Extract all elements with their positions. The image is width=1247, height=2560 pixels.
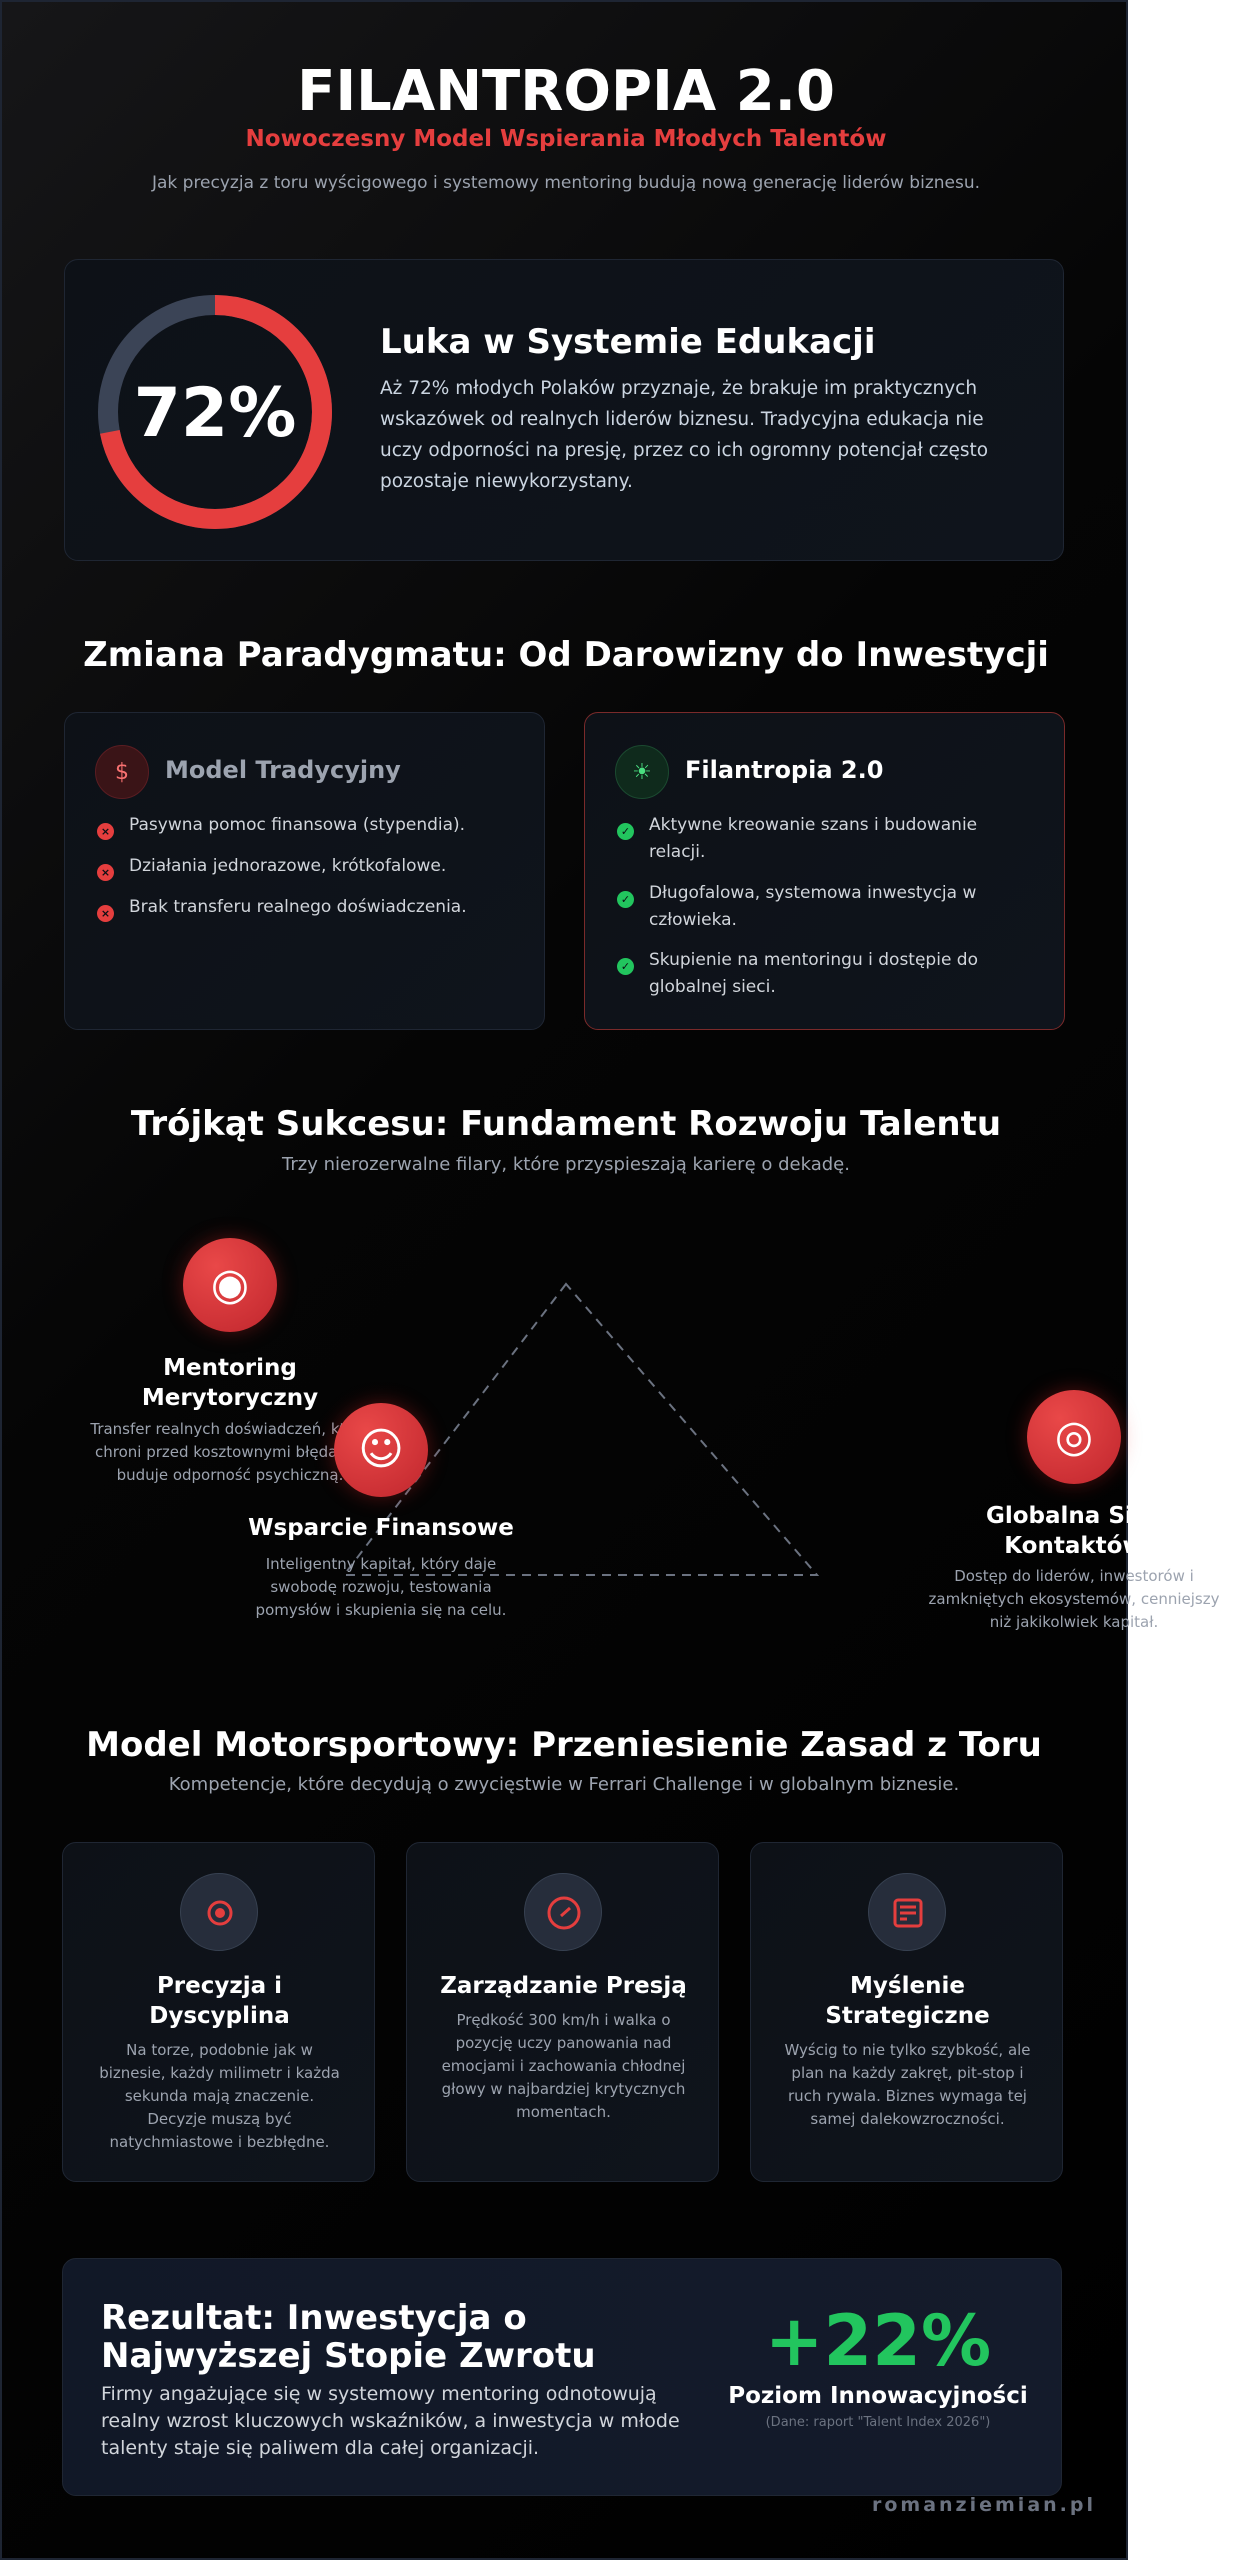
panel: philanthropy 2.0 [584,712,1065,1030]
panel: traditional model [64,712,545,1030]
pillar: mentoring: Merytoryczny [142,1385,318,1411]
panel: strategy: Myślenie [850,1973,965,1999]
stat +22% [728,2300,1028,2430]
heading: triangle: Trójkąt Sukcesu: Fundament Rozwoju Talentu [131,1104,1001,1144]
pillar: global network: Dostęp do liderów, inwestorów i zamkniętych ekosystemów, cenniejszy niż jakikolwiek kapitał. [929,1567,1219,1631]
pillar: financial support: Wsparcie Finansowe [248,1515,514,1541]
pillar: financial support: Inteligentny kapitał, który daje swobodę rozwoju, testowania pomysłów i skupienia się na celu. [256,1555,506,1619]
title: FILANTROPIA 2.0 [297,59,835,124]
icon: network [1027,1390,1121,1484]
icon: person [183,1238,277,1332]
list: Skupienie na mentoringu i dostępie do globalnej sieci. [649,950,978,997]
stat +22%: (Dane: raport "Talent Index 2026") [766,2415,990,2430]
heading: Rezultat: Inwestycja o Najwyższej Stopie Zwrotu [101,2298,596,2376]
pillar: global network: Kontaktów [1004,1533,1144,1559]
panel: precision: Na torze, podobnie jak w biznesie, każdy milimetr i każda sekunda mają znaczenie. Decyzje muszą być natychmiastowe i bezbłędne. [99,2041,340,2151]
icon: person: ◉ [211,1259,249,1310]
triangle diagram [346,1282,819,1576]
list: × [101,866,110,879]
tagline: Jak precyzja z toru wyścigowego i systemowy mentoring budują nową generację liderów biznesu. [152,173,980,193]
subtitle: Nowoczesny Model Wspierania Młodych Talentów [246,126,886,152]
stat +22%: +22% [765,2300,991,2382]
list: ✓ [621,960,630,973]
list: Działania jednorazowe, krótkofalowe. [129,856,446,876]
pillar: global network [929,1380,1219,1631]
list: Aktywne kreowanie szans i budowanie relacji. [649,815,977,862]
icon: wallet: ☺ [358,1424,404,1475]
list: Długofalowa, systemowa inwestycja w człowieka. [649,883,976,930]
heading: Luka w Systemie Edukacji [380,322,875,362]
panel: pressure: Prędkość 300 km/h i walka o pozycję uczy panowania nad emocjami i zachowania chłodnej głowy w najbardziej krytycznych momentach. [442,2011,685,2121]
heading: Model Tradycyjny [165,756,401,784]
pillar: financial support [248,1392,514,1619]
donut chart 72%: 72% [134,374,296,453]
pillar: global network: Globalna Sieć [986,1503,1162,1529]
panel: precision: Precyzja i [157,1973,282,1999]
list: × [101,907,110,920]
text block: Aż 72% młodych Polaków przyznaje, że brakuje im praktycznych wskazówek od realnych liderów biznesu. Tradycyjna edukacja nie uczy odporności na presję, przez co ich ogromny potencjał często pozostaje niewykorzystany. [380,378,988,492]
list: Brak transferu realnego doświadczenia. [129,897,467,917]
panel: pressure [406,1842,719,2182]
icon: gauge [524,1873,602,1951]
panel: result [62,2258,1062,2496]
list: ✓ [621,825,630,838]
footer: romanziemian.pl [872,2494,1096,2516]
icon: coin [95,745,149,799]
heading: motorsport: Model Motorsportowy: Przeniesienie Zasad z Toru [86,1725,1042,1765]
list: Pasywna pomoc finansowa (stypendia). [129,815,465,835]
panel: pressure: Zarządzanie Presją [440,1973,687,1999]
panel: strategy: Strategiczne [825,2003,990,2029]
panel: education gap [64,259,1064,561]
icon: wallet [334,1403,428,1497]
heading: Filantropia 2.0 [685,756,883,784]
list [97,815,467,922]
icon: document [868,1873,946,1951]
text block: Firmy angażujące się w systemowy mentoring odnotowują realny wzrost kluczowych wskaźników, a inwestycja w młode talenty staje się paliwem dla całej organizacji. [101,2383,680,2459]
pillar: mentoring [90,1228,370,1484]
list: × [101,825,110,838]
pillar: mentoring: Transfer realnych doświadczeń, który chroni przed kosztownymi błędami i buduje odporność psychiczną. [90,1420,370,1484]
icon: lightbulb [615,745,669,799]
panel: precision: Dyscyplina [149,2003,290,2029]
icon: target [180,1873,258,1951]
list: ✓ [621,893,630,906]
icon: coin: $ [115,760,129,785]
subtitle: Kompetencje, które decydują o zwycięstwie w Ferrari Challenge i w globalnym biznesie. [169,1774,959,1795]
list [617,815,978,997]
panel: precision [62,1842,375,2182]
panel: strategy [750,1842,1063,2182]
pillar: mentoring: Mentoring [163,1355,297,1381]
subtitle: Trzy nierozerwalne filary, które przyspieszają karierę o dekadę. [282,1154,850,1175]
stat +22%: Poziom Innowacyjności [728,2383,1028,2409]
icon: network: ◎ [1055,1411,1093,1462]
icon: lightbulb: ☀ [632,760,652,785]
panel: strategy: Wyścig to nie tylko szybkość, ale plan na każdy zakręt, pit-stop i ruch rywala. Biznes wymaga tej samej dalekowzroczności. [784,2041,1031,2128]
heading: paradigm: Zmiana Paradygmatu: Od Darowizny do Inwestycji [83,635,1049,675]
donut chart 72% [98,295,332,529]
